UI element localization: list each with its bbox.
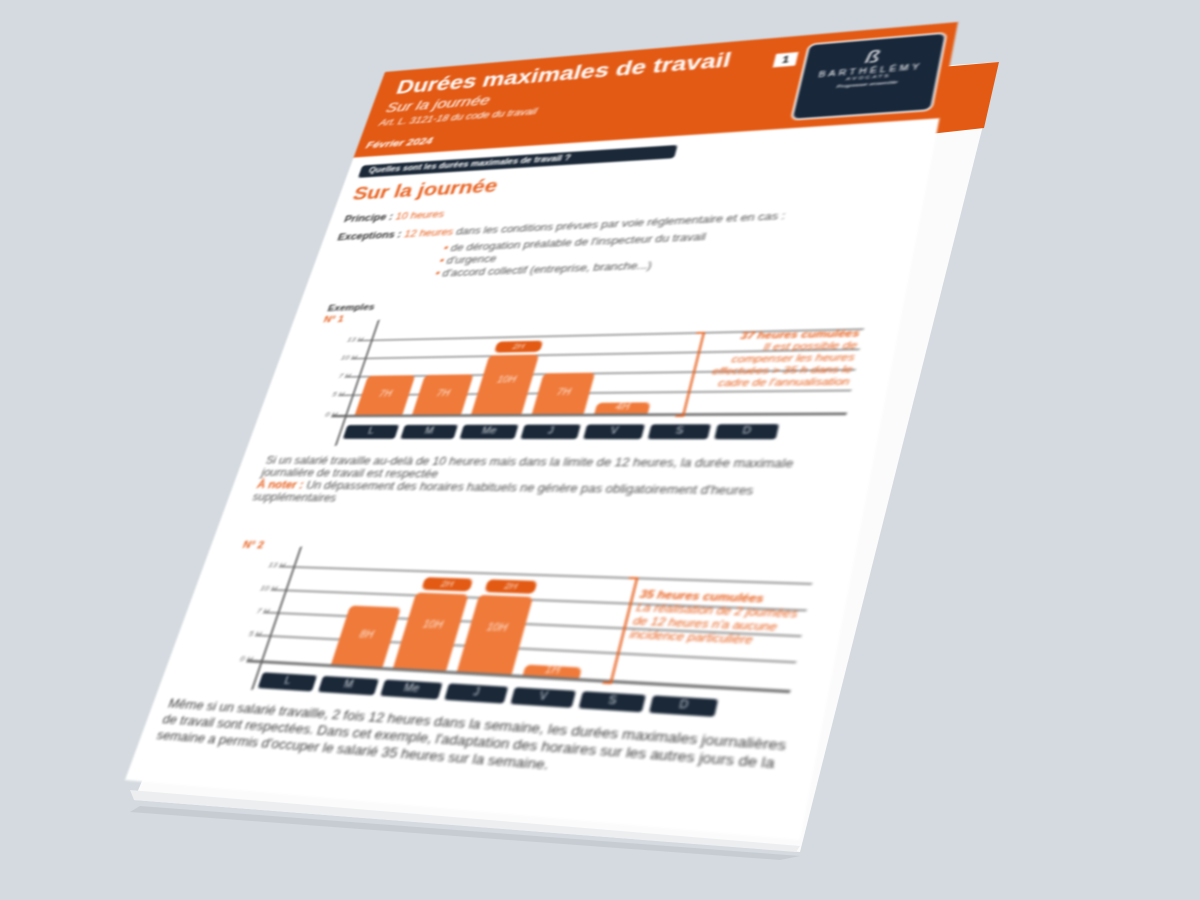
chart 1: 0 H [324,411,338,418]
chart 2: La réalisation de 2 journées de 12 heures n'a aucune incidence particulière [628,602,799,647]
chart 2: J [472,687,481,699]
chart 2: 10 H [259,584,278,593]
question badge [358,145,678,178]
examples label: Exemples [326,303,376,314]
chart 1: Il est possible de compenser les heures effectuées > 35 h dans le cadre de l'annualisation [711,340,858,389]
chart 2 [239,539,814,719]
chart 1: 10 H [340,354,358,361]
chart 2: N° 2 [241,540,265,551]
title: Durées maximales de travail [394,49,734,98]
chart 2: 0 H [239,654,254,664]
logo: ß [864,47,882,67]
chart 1: 5 H [331,390,345,398]
exception bullets: • d'accord collectif (entreprise, branche...) [434,260,653,279]
chart 2: L [283,676,292,687]
exception bullets: • d'urgence [438,253,498,266]
chart 1: 10H [496,375,517,385]
chart 1: S [674,426,684,436]
logo: AVOCATS [846,74,891,82]
exceptions: Exceptions : 12 heures dans les conditions prévues par voie réglementaire et en cas : [336,210,787,243]
chart 2: Me [402,683,420,695]
chart 2: D [678,699,689,712]
chart 2: 8H [358,630,375,641]
chart 1: D [741,426,752,436]
principle: Principe : 10 heures [343,209,446,224]
exception bullets: • de dérogation préalable de l'inspecteur du travail [442,231,707,254]
chart 1: M [424,427,435,436]
chart 1: 2H [512,342,526,351]
explanation text 1 [251,454,795,504]
explanation text 1: Si un salarié travaille au-delà de 10 heures mais dans la limite de 12 heures, la durée maximale journalière de travail est respectée [260,454,795,480]
chart 1: 7H [378,390,393,399]
chart 2: 10H [485,622,508,634]
header band [354,22,958,158]
subtitle: Sur la journée [384,93,492,116]
chart 2: 1H [544,665,561,677]
chart 2: 2H [503,581,519,591]
page number [773,52,798,67]
chart 1 [322,314,866,447]
chart 1: 37 heures cumulées [739,328,861,342]
chart 2: 7 H [256,606,271,616]
date: Février 2024 [365,135,434,151]
chart 2: 5 H [248,629,263,638]
chart 1: N° 1 [322,315,345,325]
chart 2: 10H [421,620,444,631]
chart 1: J [547,426,555,436]
chart 1: L [367,427,375,436]
legal reference: Art. L. 3121-18 du code du travail [378,106,538,128]
chart 2: 35 heures cumulées [638,589,765,606]
chart 2: M [342,679,355,691]
logo: BARTHÉLÉMY [817,63,923,80]
chart 2: V [538,691,548,703]
chart 2: S [607,695,618,707]
chart 2: 13 H [267,561,286,569]
question badge: Quelles sont les durées maximales de travail ? [367,154,572,175]
chart 1: 7H [435,389,451,399]
explanation text 2: Même si un salarié travaille, 2 fois 12 heures dans la semaine, les durées maximales journalières de travail sont respectées. Dans cet exemple, l'adaptation des horaires sur les autres jours de la semaine a permis d'occuper le salarié 35 heures sur la semaine. [155,696,788,773]
chart 1: 7 H [338,372,352,380]
document page [125,22,958,840]
chart 1: 4H [614,403,631,413]
explanation text 1: À noter : Un dépassement des horaires habituels ne génère pas obligatoirement d'heures supplémentaires [251,478,755,504]
chart 1: 13 H [346,336,364,343]
chart 1: 7H [556,388,572,398]
logo [790,32,948,121]
logo: Progresser ensemble [836,80,898,90]
exception bullets [434,231,708,279]
chart 2: 2H [440,579,455,589]
chart 1: V [609,426,619,436]
section heading: Sur la journée [350,176,501,204]
page number: 1 [781,54,790,65]
chart 1: Me [481,426,498,436]
